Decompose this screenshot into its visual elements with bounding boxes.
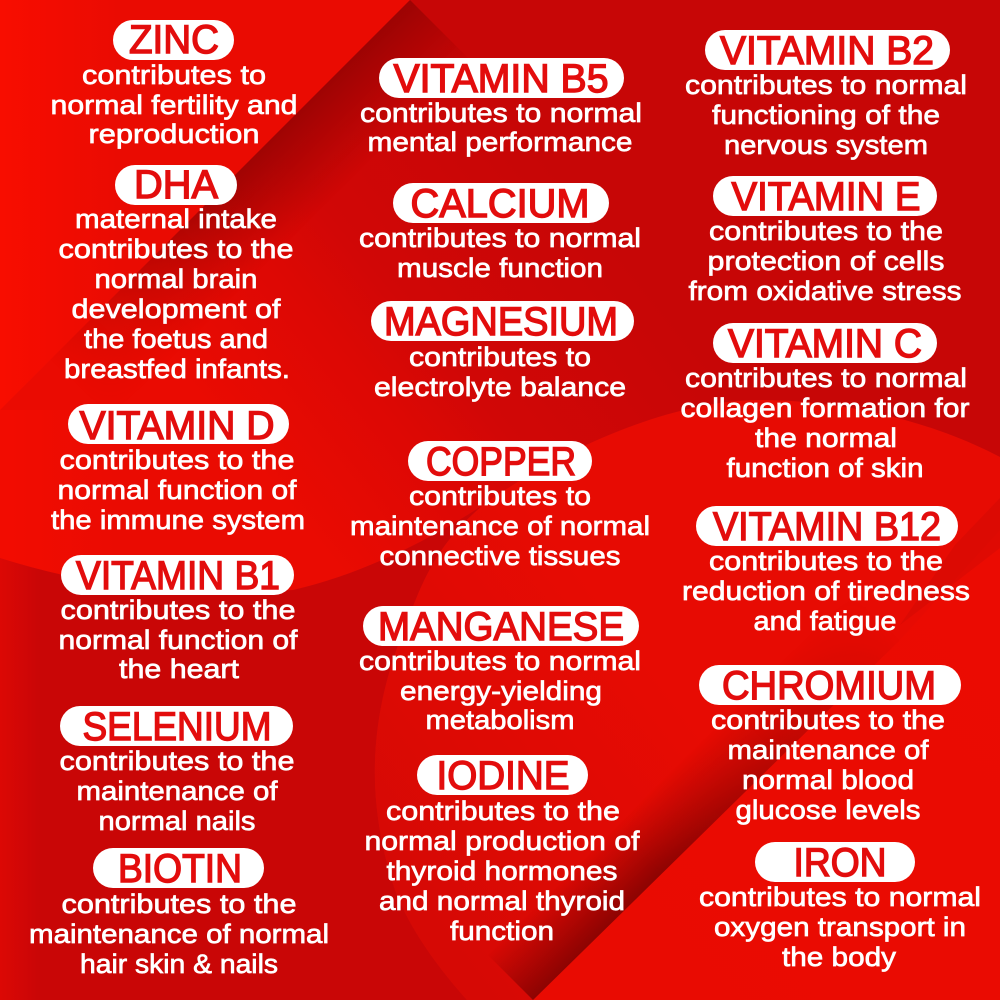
IODINE: and normal thyroid [379, 886, 625, 916]
IODINE: normal production of [364, 826, 640, 856]
IODINE: function [450, 916, 554, 946]
VITAMIN E: contributes to the [709, 216, 943, 246]
VITAMIN B2: functioning of the [712, 100, 940, 130]
VITAMIN E: protection of cells [708, 246, 944, 276]
CHROMIUM: maintenance of [728, 735, 929, 765]
DHA: the foetus and [84, 324, 268, 354]
MANGANESE [359, 605, 641, 735]
BIOTIN [29, 847, 329, 979]
ZINC: contributes to [82, 60, 266, 90]
VITAMIN D [51, 404, 305, 535]
DHA: contributes to the [58, 234, 294, 264]
BIOTIN: hair skin & nails [80, 949, 278, 979]
VITAMIN C: collagen formation for [680, 393, 970, 423]
DHA: breastfed infants. [64, 354, 290, 384]
VITAMIN D: VITAMIN D [80, 404, 274, 448]
COPPER: connective tissues [380, 541, 620, 571]
DHA: normal brain [94, 264, 258, 294]
MAGNESIUM [371, 300, 634, 402]
VITAMIN B2: contributes to normal [685, 70, 967, 100]
CALCIUM: contributes to normal [359, 223, 641, 253]
VITAMIN E: from oxidative stress [688, 276, 962, 306]
ZINC [50, 18, 298, 149]
IRON: the body [782, 942, 897, 972]
VITAMIN B12: and fatigue [754, 606, 896, 636]
CHROMIUM [699, 664, 961, 825]
VITAMIN B12 [682, 505, 970, 636]
MAGNESIUM: MAGNESIUM [384, 300, 618, 344]
VITAMIN B2 [685, 29, 967, 160]
ZINC: reproduction [88, 119, 260, 149]
COPPER: contributes to [409, 481, 591, 511]
VITAMIN B12: contributes to the [709, 546, 943, 576]
VITAMIN B1: normal function of [58, 625, 298, 655]
VITAMIN D: contributes to the [60, 445, 294, 475]
VITAMIN C: contributes to normal [685, 363, 967, 393]
IRON: oxygen transport in [714, 912, 966, 942]
VITAMIN B1: the heart [119, 654, 240, 684]
CALCIUM: CALCIUM [410, 182, 590, 226]
IODINE [364, 754, 640, 946]
BIOTIN: maintenance of normal [29, 919, 329, 949]
COPPER [350, 440, 650, 571]
MAGNESIUM: electrolyte balance [374, 372, 626, 402]
ZINC: normal fertility and [50, 90, 298, 120]
CALCIUM: muscle function [397, 253, 603, 283]
MANGANESE: metabolism [426, 705, 574, 735]
MANGANESE: energy-yielding [400, 676, 602, 706]
IRON: IRON [794, 841, 886, 885]
DHA [58, 163, 294, 384]
SELENIUM: contributes to the [60, 746, 294, 776]
VITAMIN B2: nervous system [724, 130, 928, 160]
MANGANESE: MANGANESE [378, 605, 624, 649]
SELENIUM: SELENIUM [82, 705, 272, 749]
VITAMIN B5: VITAMIN B5 [394, 57, 608, 101]
DHA: development of [72, 294, 281, 324]
CHROMIUM: normal blood [742, 765, 914, 795]
DHA: DHA [134, 163, 218, 207]
VITAMIN B1 [58, 554, 298, 684]
VITAMIN D: normal function of [58, 475, 297, 505]
VITAMIN B5: mental performance [368, 127, 632, 157]
SELENIUM: maintenance of [76, 776, 278, 806]
VITAMIN B1: VITAMIN B1 [76, 554, 280, 598]
CHROMIUM: CHROMIUM [722, 664, 936, 708]
IRON: contributes to normal [699, 882, 981, 912]
CALCIUM [359, 182, 641, 283]
VITAMIN B12: VITAMIN B12 [713, 505, 941, 549]
VITAMIN B5 [360, 57, 642, 157]
SELENIUM: normal nails [98, 806, 256, 836]
VITAMIN C: the normal [755, 423, 897, 453]
CHROMIUM: glucose levels [736, 795, 920, 825]
VITAMIN E [688, 175, 962, 306]
IRON [699, 841, 981, 972]
VITAMIN B12: reduction of tiredness [682, 576, 970, 606]
VITAMIN D: the immune system [51, 505, 305, 535]
VITAMIN C: VITAMIN C [728, 322, 922, 366]
VITAMIN E: VITAMIN E [732, 175, 920, 219]
SELENIUM [60, 705, 294, 836]
BIOTIN: contributes to the [62, 889, 296, 919]
MAGNESIUM: contributes to [409, 342, 591, 372]
VITAMIN B2: VITAMIN B2 [720, 29, 934, 73]
VITAMIN B5: contributes to normal [360, 98, 642, 128]
IODINE: contributes to the [386, 796, 620, 826]
DHA: maternal intake [75, 204, 277, 234]
IODINE: IODINE [436, 754, 570, 798]
ZINC: ZINC [129, 18, 219, 62]
VITAMIN C [680, 322, 970, 483]
COPPER: maintenance of normal [350, 511, 650, 541]
IODINE: thyroid hormones [386, 856, 618, 886]
VITAMIN B1: contributes to the [60, 595, 296, 625]
CHROMIUM: contributes to the [711, 705, 945, 735]
VITAMIN C: function of skin [726, 453, 924, 483]
COPPER: COPPER [426, 440, 576, 484]
MANGANESE: contributes to normal [359, 646, 641, 676]
BIOTIN: BIOTIN [118, 847, 242, 891]
